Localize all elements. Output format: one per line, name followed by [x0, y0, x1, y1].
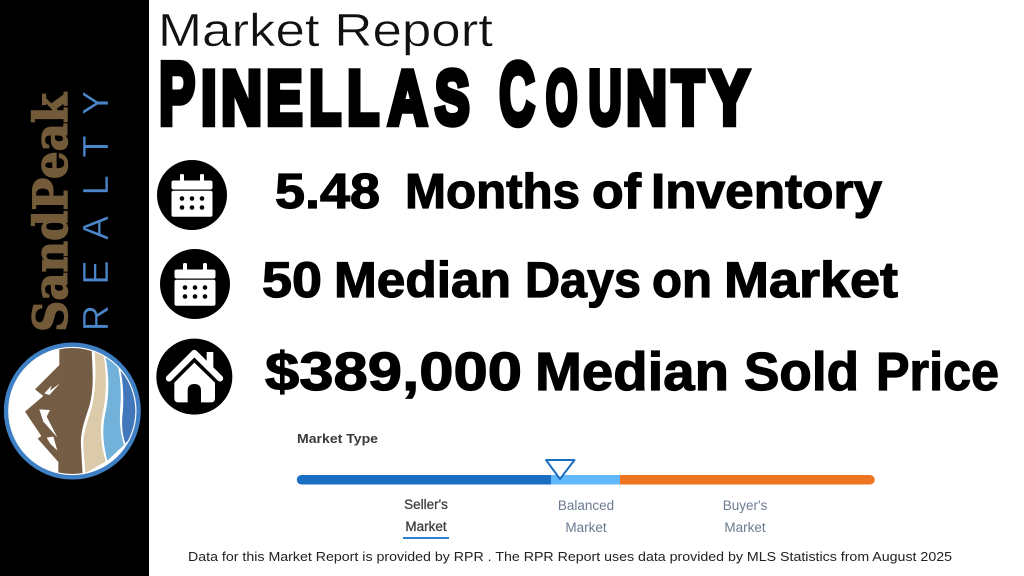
bar: buyer's market segment [620, 475, 875, 484]
icon: house [156, 339, 232, 415]
title: Pinellas County: L [347, 55, 379, 140]
title: Pinellas County: P [159, 46, 195, 143]
stat: median sold price: $389,000 [265, 342, 522, 402]
stat: median days on market: on [652, 252, 712, 308]
label: Buyer's Market [723, 498, 768, 535]
brand name: REALTY: REALTY [75, 91, 116, 331]
stat: median days on market: 50 [262, 252, 322, 308]
stat: months of inventory: Months [405, 165, 580, 219]
stat: months of inventory: of [592, 165, 642, 219]
title: Pinellas County: C [499, 45, 535, 144]
label: Buyer's Market: Buyer's [723, 498, 768, 513]
title: Pinellas County: N [221, 56, 262, 141]
icon: calendar (months of inventory) [157, 160, 227, 230]
label: Buyer's Market: Market [724, 520, 766, 535]
stat: months of inventory [275, 165, 882, 219]
label: Seller's Market: Seller's [404, 497, 448, 512]
icon: calendar (days on market) [160, 249, 230, 319]
stat: median days on market: Days [525, 252, 641, 308]
stat: median days on market: Market [724, 252, 898, 308]
title: Pinellas County: A [388, 55, 427, 140]
icon: SandPeak logo [6, 345, 139, 477]
title: Pinellas County: U [589, 56, 622, 141]
title: Pinellas County: N [626, 56, 667, 141]
stat: median days on market: Median [334, 252, 511, 308]
title: Pinellas County [159, 45, 749, 144]
label: Seller's Market: Market [405, 519, 447, 534]
stat: median sold price: Sold [744, 342, 859, 402]
stat: median sold price: Price [876, 342, 999, 402]
title: Pinellas County: I [201, 56, 217, 141]
footer: data source note: Data for this Market Report is provided by RPR . The RPR Report uses data provided by MLS Statistics from August 2025 [188, 550, 952, 564]
stat: months of inventory: Inventory [651, 165, 882, 219]
label: Balanced Market: Market [565, 520, 607, 535]
marker: triangle pointer [546, 460, 574, 479]
stat: median days on market [262, 252, 898, 308]
heading: Market Type: Market Type [297, 432, 378, 446]
title: Pinellas County: Y [710, 56, 749, 141]
label: Balanced Market: Balanced [558, 498, 614, 513]
label: Seller's Market [403, 497, 449, 539]
bar: seller's market segment [297, 475, 551, 484]
chart: market type scale [297, 432, 875, 539]
stat: median sold price [265, 342, 999, 402]
title: Pinellas County: E [266, 55, 302, 140]
title: Market Report: Market Report [158, 4, 493, 56]
stat: months of inventory: 5.48 [275, 165, 380, 219]
title: Pinellas County: S [435, 55, 469, 140]
bar: balanced market segment [551, 475, 620, 484]
label: Balanced Market [558, 498, 614, 535]
stat: median sold price: Median [535, 342, 729, 402]
panel: black brand sidebar [0, 0, 149, 576]
brand name: SandPeak: SandPeak [24, 92, 79, 332]
title: Pinellas County: L [309, 55, 341, 140]
title: Pinellas County: O [546, 55, 577, 140]
title: Pinellas County: T [672, 55, 704, 140]
